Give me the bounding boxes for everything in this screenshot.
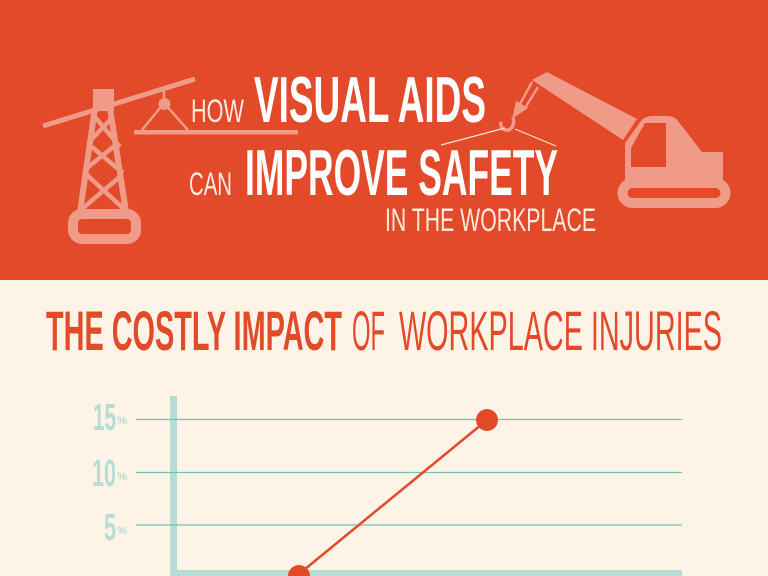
chart axes bbox=[174, 396, 682, 574]
y-axis label 5%: 5 bbox=[104, 507, 116, 549]
y-axis label 10%: 10 bbox=[92, 453, 116, 495]
header banner bbox=[0, 0, 768, 280]
title line 1: VISUAL AIDS bbox=[254, 63, 486, 136]
title line 3: IN THE WORKPLACE bbox=[385, 202, 596, 238]
title line 1 bbox=[191, 63, 486, 136]
title line 1: HOW bbox=[191, 93, 245, 129]
y-axis label 10%: % bbox=[117, 471, 127, 483]
icon: suspended beam bbox=[134, 90, 298, 134]
title line 2 bbox=[189, 136, 558, 209]
icon: mobile crane bbox=[441, 72, 726, 203]
icon: tower crane bbox=[43, 79, 195, 239]
data line bbox=[288, 409, 498, 576]
y-axis label 5%: % bbox=[117, 525, 127, 537]
line chart bbox=[92, 396, 682, 576]
section heading: OF bbox=[352, 299, 385, 362]
title line 2: CAN bbox=[189, 166, 232, 202]
y-axis label 15%: % bbox=[117, 415, 127, 427]
section heading: THE COSTLY IMPACT bbox=[46, 299, 342, 362]
title bbox=[189, 63, 596, 238]
y-axis label 15%: 15 bbox=[93, 397, 116, 439]
